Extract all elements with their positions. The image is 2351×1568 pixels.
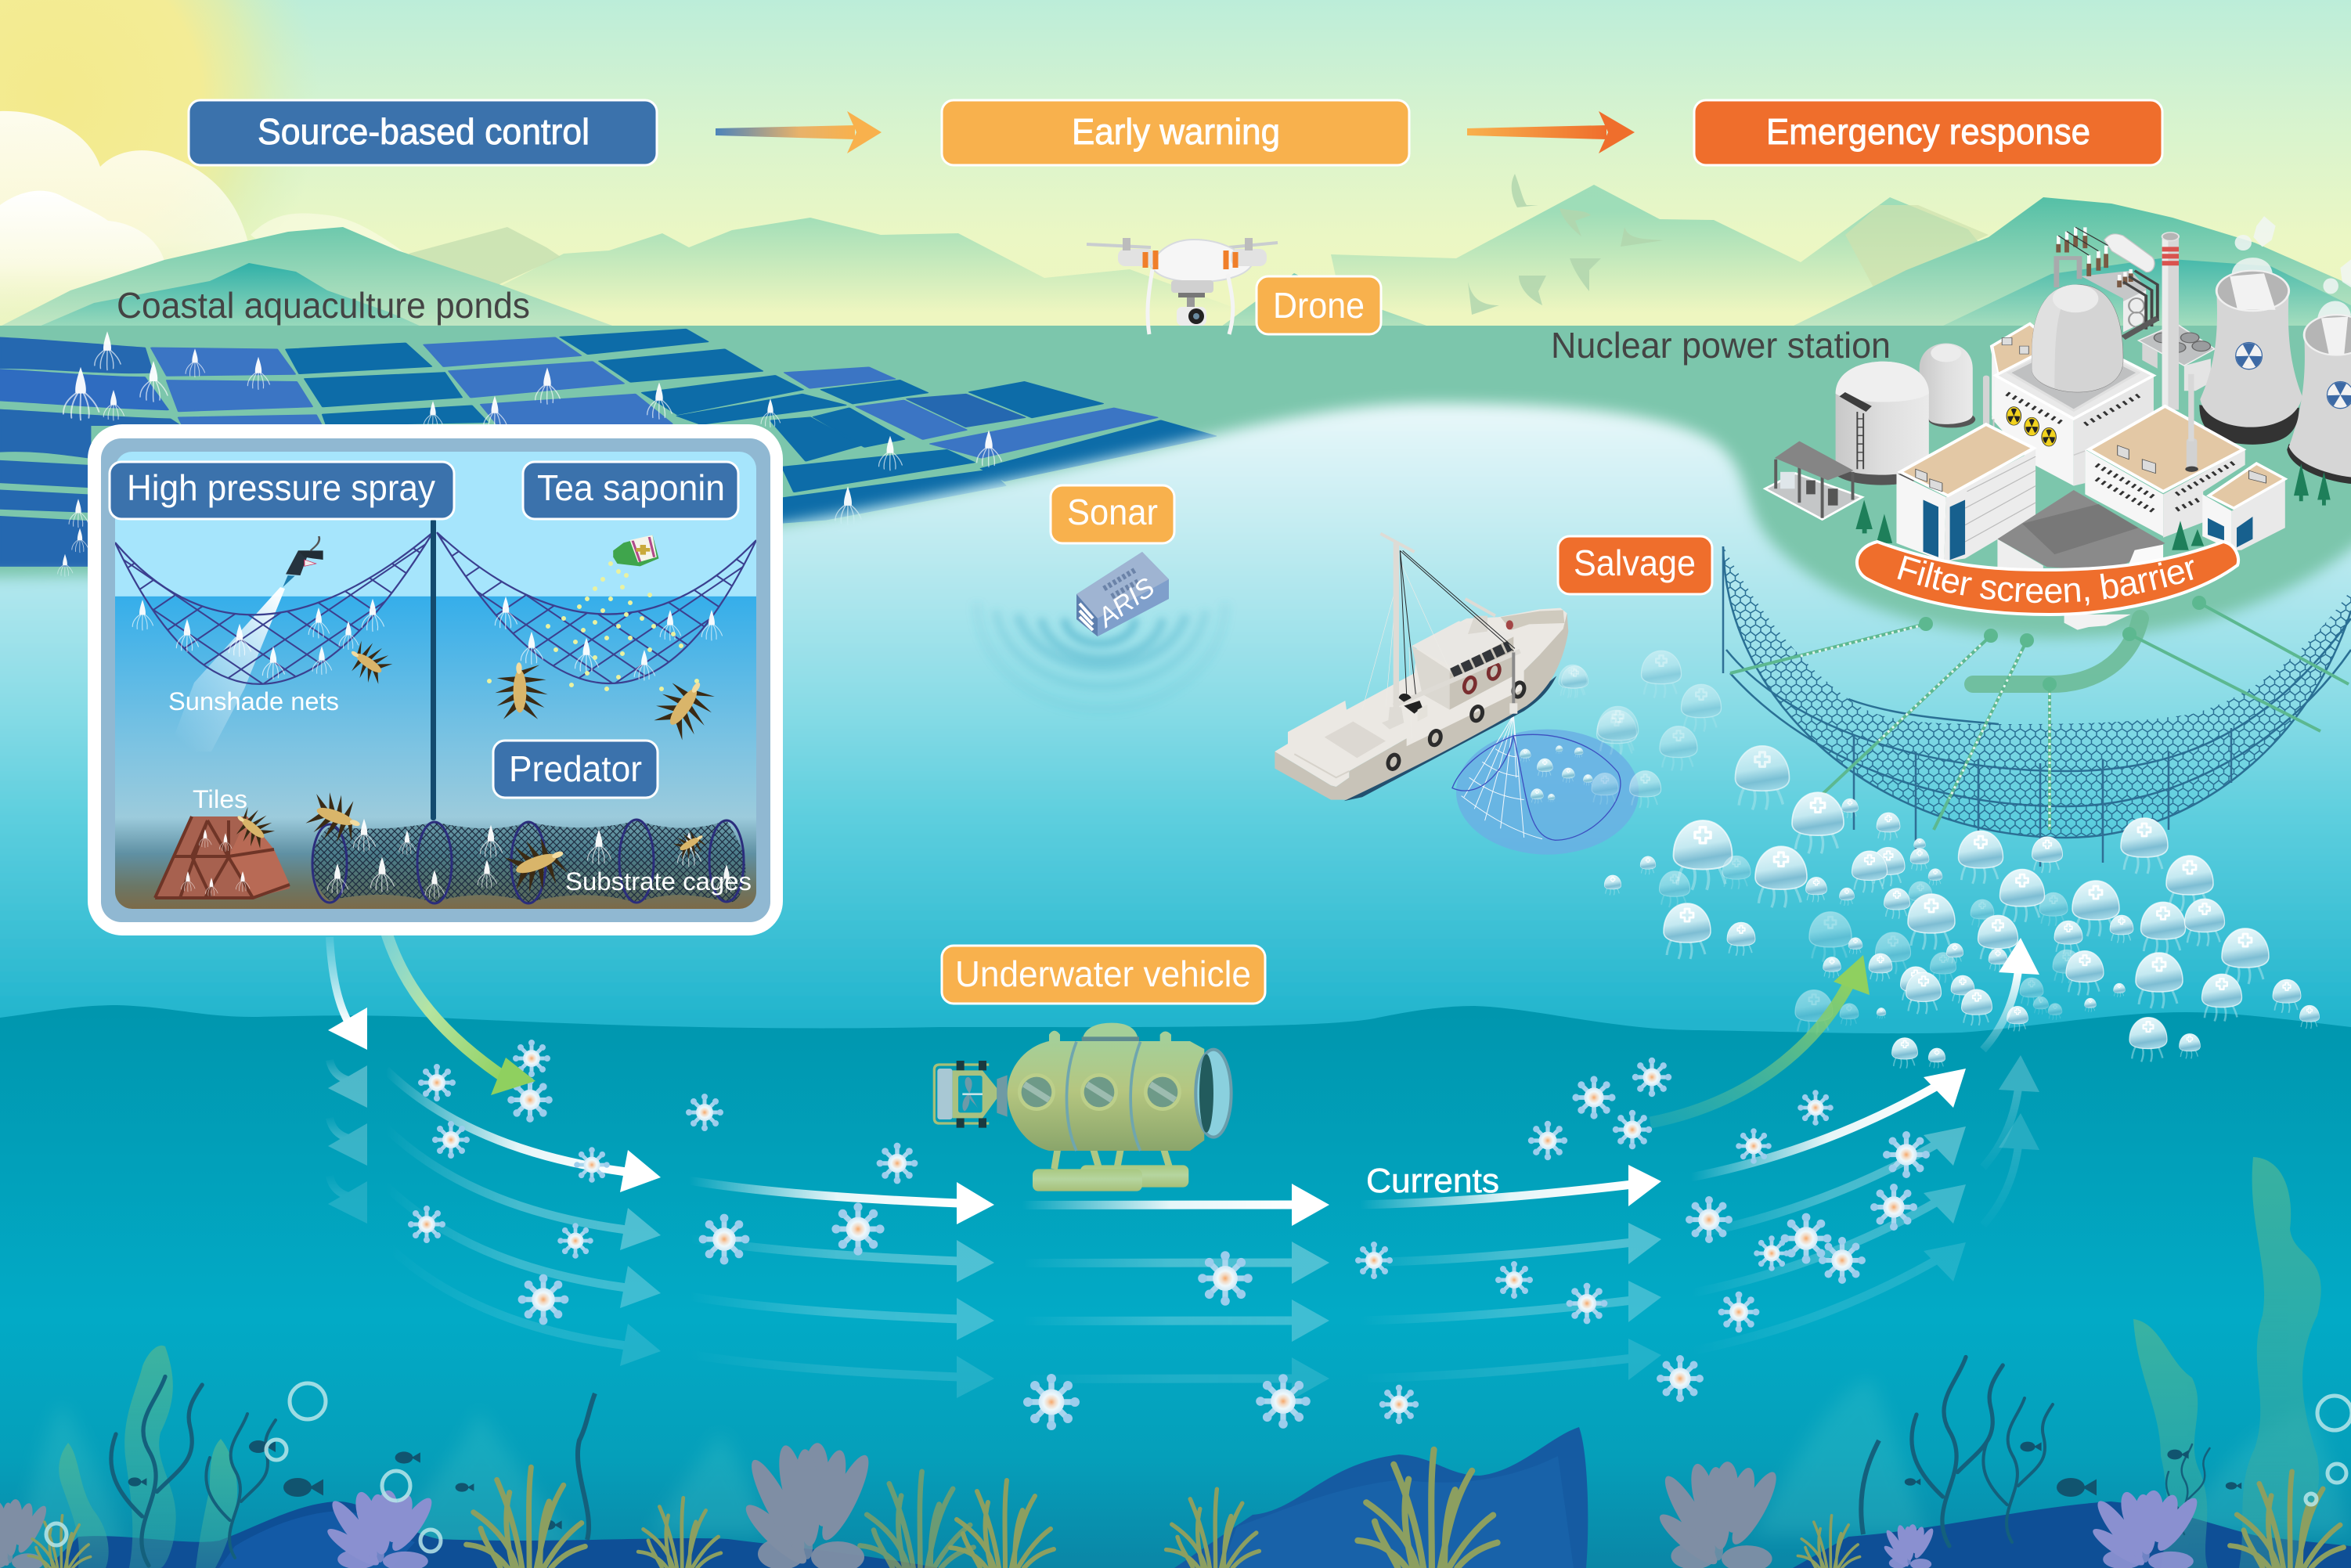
mountains — [0, 185, 2351, 326]
cabin — [1412, 646, 1450, 710]
nuclear power station — [1765, 216, 2351, 630]
label: underwater vehicle: Underwater vehicle — [955, 953, 1251, 994]
underwater vehicle — [934, 1023, 1231, 1191]
deep water — [0, 1005, 2351, 1568]
fishing boat and net — [1275, 534, 1661, 855]
label: predator — [493, 741, 658, 798]
right office block — [2085, 374, 2245, 538]
small silo — [1920, 344, 1975, 427]
deck — [1275, 608, 1567, 787]
ephyrae in the currents — [411, 1043, 1926, 1426]
stage: early warning — [942, 100, 1409, 165]
jellyfish swarm — [1559, 651, 2320, 1069]
hull side — [1275, 613, 1568, 800]
propeller frame — [934, 1061, 1008, 1128]
label: nuclear power station: Nuclear power station — [1551, 325, 1891, 366]
stage: emergency response — [1694, 100, 2162, 165]
label: sonar: Sonar — [1067, 492, 1158, 532]
label: tea saponin: Tea saponin — [537, 467, 725, 508]
label: salvage — [1558, 536, 1712, 594]
predators — [351, 640, 715, 741]
birds — [1468, 174, 1664, 315]
kelp left — [59, 1346, 237, 1568]
sun — [0, 0, 321, 364]
banner: filter screen, barrier — [1855, 540, 2241, 616]
fish — [128, 1440, 2241, 1530]
label: substrate cages: Substrate cages — [565, 867, 752, 896]
stage: source-based control: Source-based control — [258, 111, 590, 152]
spray jet — [168, 587, 285, 752]
label: sonar — [1051, 485, 1174, 543]
cooling tower one — [2199, 271, 2302, 445]
rear block — [1992, 324, 2043, 419]
corals — [0, 1442, 2204, 1568]
label: predator: Predator — [509, 748, 642, 789]
sea floor rocks — [47, 1427, 2351, 1568]
transformer yard — [2057, 227, 2158, 337]
bubbles — [46, 1383, 2351, 1552]
pile of tiles — [155, 802, 290, 898]
large tank — [1831, 362, 1931, 485]
small office block — [2202, 463, 2285, 550]
flow arrows — [328, 937, 1966, 1400]
filter net barrier — [1723, 546, 2351, 867]
sea grass glow — [16, 1378, 2351, 1558]
label: drone — [1257, 276, 1381, 334]
background sky — [0, 0, 2351, 329]
kelp right — [2133, 1157, 2321, 1568]
aquaculture ponds — [0, 330, 1215, 566]
label: tiles: Tiles — [193, 785, 247, 813]
icon: spray gun — [283, 536, 323, 587]
stage: emergency response: Emergency response — [1766, 111, 2090, 152]
sunshade net right — [437, 532, 756, 683]
label: underwater vehicle — [942, 946, 1265, 1004]
label: high pressure spray: High pressure spray — [127, 467, 435, 508]
label: tea saponin — [523, 462, 738, 519]
arrow: white rising — [1983, 938, 2039, 1225]
icon: ARIS sonar — [1076, 552, 1169, 636]
cooling tower two — [2287, 315, 2351, 485]
substrate cages — [303, 787, 745, 903]
shallow water — [0, 403, 2351, 1096]
arrow: green to ephyra — [378, 898, 535, 1095]
clouds — [0, 111, 423, 368]
label: coastal aquaculture ponds: Coastal aquaculture ponds — [117, 285, 530, 326]
sea grass — [28, 1450, 2344, 1568]
seaweed — [111, 1357, 2209, 1566]
divider pole — [431, 519, 436, 820]
fan units — [2138, 324, 2215, 391]
reactor building — [1983, 285, 2154, 486]
steam — [2232, 216, 2351, 318]
panel: source-based control inset — [88, 424, 783, 935]
icon: tea saponin bottle — [613, 535, 658, 566]
sunshade net left — [124, 543, 424, 683]
label: sunshade nets: Sunshade nets — [168, 687, 339, 716]
polyps on ponds — [58, 331, 1001, 576]
coastal land — [0, 326, 2351, 717]
sonar rings — [977, 603, 1225, 708]
banner: filter screen, barrier: Filter screen, barrier — [1898, 556, 2194, 606]
icon: drone — [1087, 238, 1278, 334]
label: currents: Currents — [1366, 1162, 1499, 1200]
arrow: control to warning — [716, 111, 882, 153]
polyps on nets — [132, 597, 722, 680]
pump shed — [1765, 442, 1862, 520]
chimney — [2162, 232, 2179, 410]
stage: early warning: Early warning — [1072, 111, 1280, 152]
left office block — [1896, 424, 2035, 561]
plant foot — [2064, 615, 2131, 630]
net outlines — [115, 532, 756, 684]
arrow: green to medusae — [1650, 955, 1870, 1123]
trees — [1855, 463, 2331, 550]
label: salvage: Salvage — [1574, 542, 1696, 583]
mast and rigging — [1362, 564, 1451, 738]
label: high pressure spray — [110, 462, 454, 519]
icon: ARIS sonar: ARIS — [1091, 572, 1160, 634]
hauling net — [1452, 666, 1661, 855]
label: drone: Drone — [1273, 285, 1365, 326]
arrow: warning to response — [1467, 111, 1635, 153]
stage: source-based control — [189, 100, 657, 165]
tea saponin particles — [489, 564, 697, 689]
turbine hall — [1997, 490, 2165, 575]
keel — [1344, 676, 1556, 801]
